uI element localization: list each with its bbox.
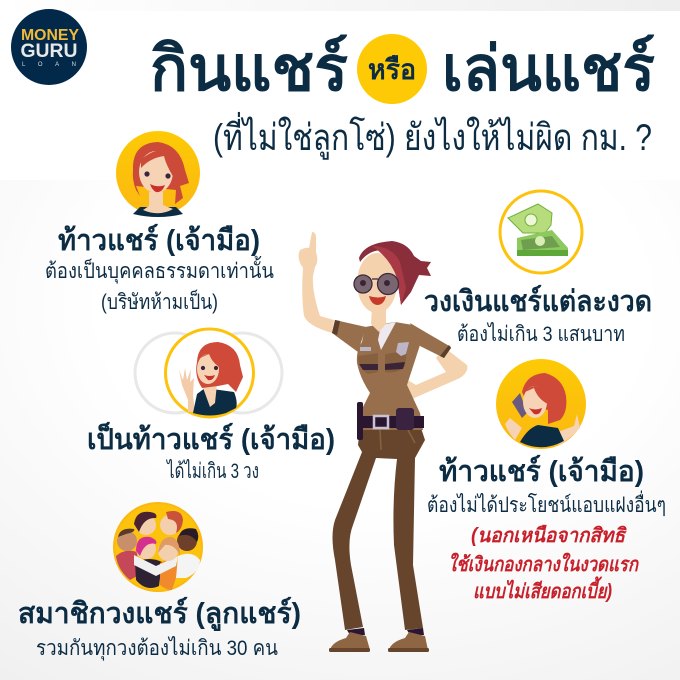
badge: or	[357, 34, 427, 104]
icon: woman phoning	[496, 359, 586, 449]
text block: red note	[448, 524, 640, 603]
icon: group of members	[114, 503, 202, 591]
logo: GURU	[20, 41, 78, 62]
icon: woman portrait yellow	[116, 131, 200, 217]
raised arm	[299, 232, 334, 333]
head	[357, 253, 397, 313]
logo	[11, 9, 87, 85]
text block: banker heading 2: เป็นท้าวแชร์ (เจ้ามือ)	[87, 421, 335, 456]
text block: members heading: สมาชิกวงแชร์ (ลูกแชร์)	[18, 596, 301, 631]
badge	[396, 342, 409, 356]
title: กินแชร์	[150, 34, 348, 104]
text block: banker condition 1: (บริษัทห้ามเป็น)	[101, 288, 218, 314]
holster	[357, 402, 363, 440]
illustration: police officer	[299, 232, 467, 652]
icon: woman waving with circles	[135, 329, 282, 417]
text block: banker condition 1: ต้องเป็นบุคคลธรรมดาเท่านั้น	[45, 256, 274, 284]
text block: red note: แบบไม่เสียดอกเบี้ย)	[473, 576, 612, 603]
sunglasses	[354, 274, 398, 294]
right arm	[391, 348, 467, 399]
sleeves	[332, 320, 366, 352]
logo: MONEY	[21, 27, 79, 44]
socks	[347, 628, 424, 635]
title: เล่นแชร์	[442, 34, 655, 104]
logo: LOAN	[22, 62, 76, 68]
text block: member limit: รวมกันทุกวงต้องไม่เกิน 30 คน	[36, 636, 278, 661]
title	[150, 34, 655, 104]
shoes	[330, 632, 370, 650]
icon: money	[500, 191, 582, 273]
text block: circle limit: ได้ไม่เกิน 3 วง	[166, 459, 259, 483]
text block: banker condition 1	[45, 256, 274, 314]
pants pockets	[380, 430, 415, 450]
torso	[357, 322, 423, 430]
text block: banker heading 3: ท้าวแชร์ (เจ้ามือ)	[439, 454, 644, 488]
belt buckle	[374, 416, 388, 428]
shirt	[378, 322, 396, 350]
hair	[359, 241, 431, 305]
text block: banker heading 1: ท้าวแชร์ (เจ้ามือ)	[58, 223, 260, 257]
belt pouch	[396, 408, 414, 430]
badge: or: หรือ	[368, 54, 416, 85]
eyes	[360, 280, 390, 286]
name plate	[360, 347, 371, 351]
text block: red note: (นอกเหนือจากสิทธิ	[471, 524, 627, 547]
text block: amount heading: วงเงินแชร์แต่ละงวด	[424, 284, 652, 318]
chest pockets	[358, 351, 407, 374]
mouth	[369, 296, 386, 305]
pants	[332, 428, 425, 630]
belt	[360, 416, 424, 428]
text block: red note: ใช้เงินกองกลางในงวดแรก	[448, 552, 640, 576]
text block: amount limit: ต้องไม่เกิน 3 แสนบาท	[457, 322, 625, 346]
